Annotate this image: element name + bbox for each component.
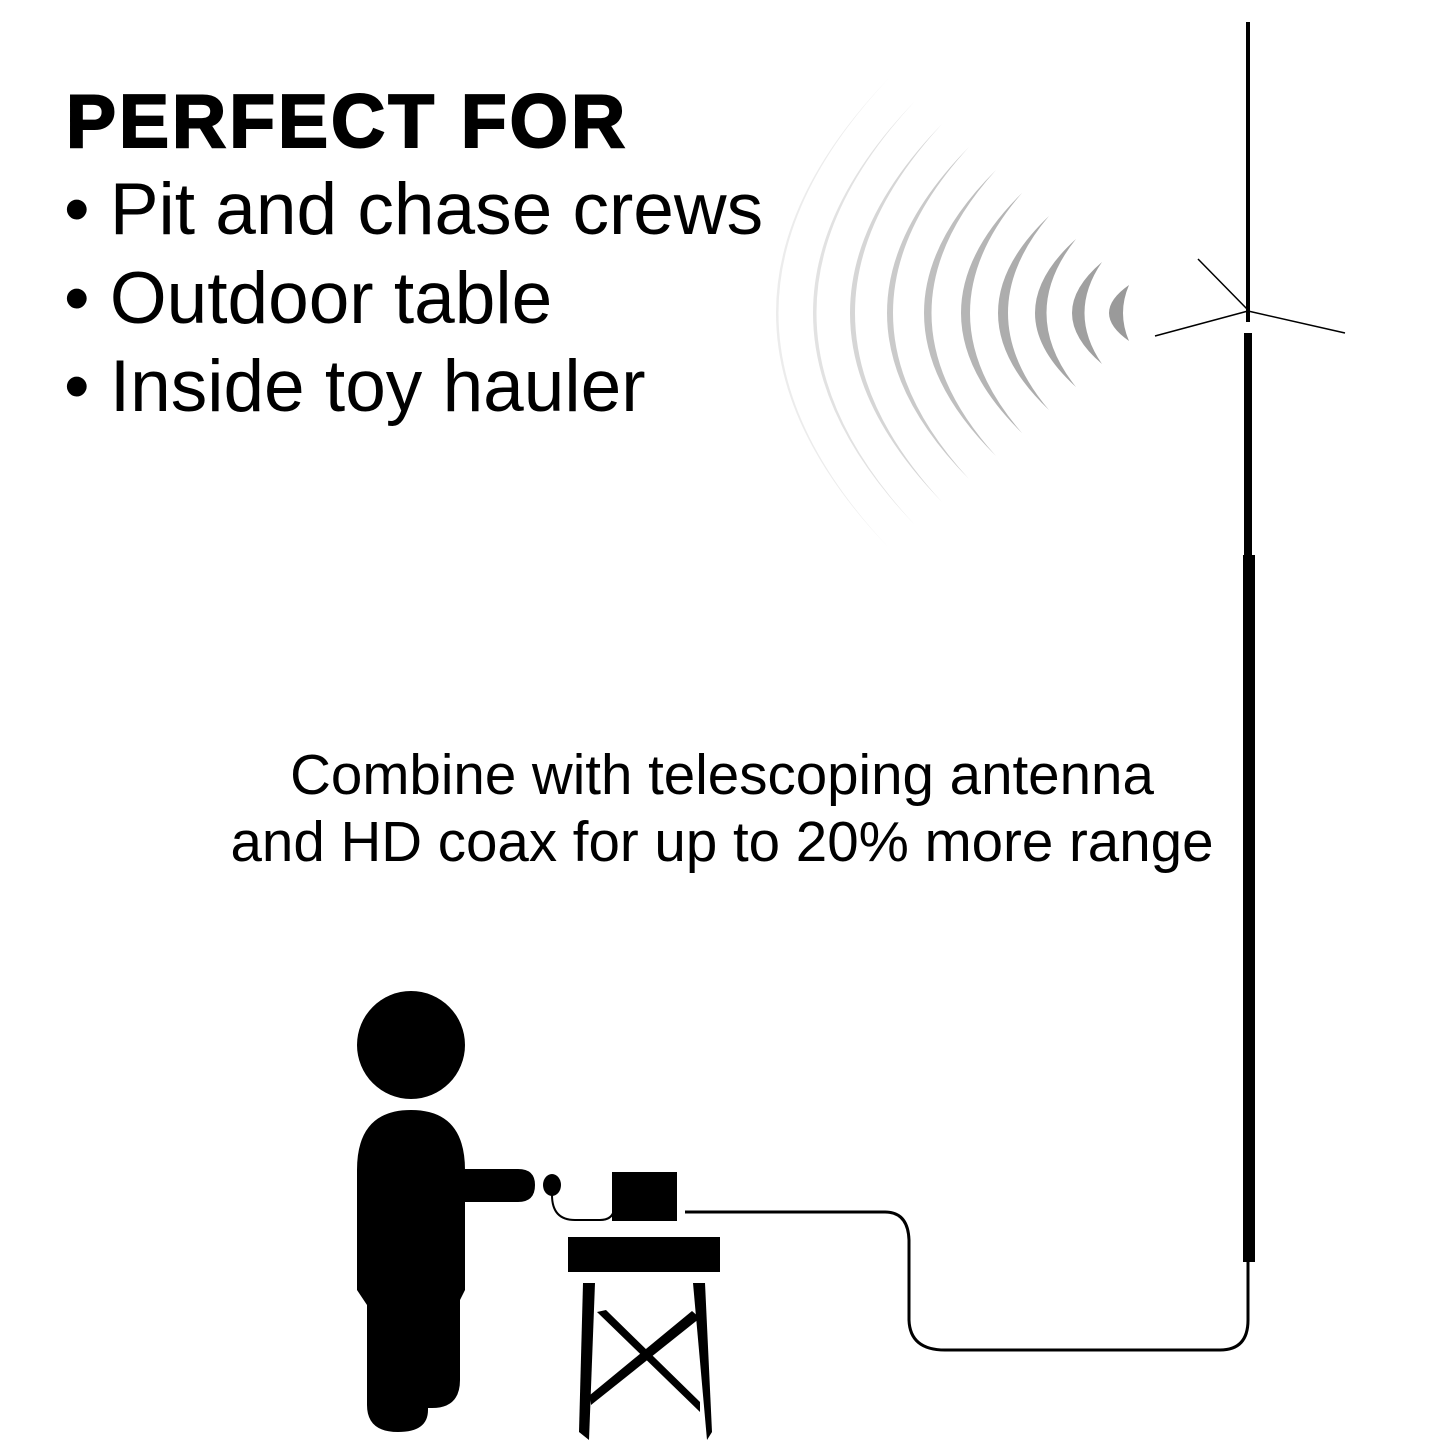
bullet 3: • Inside toy hauler xyxy=(64,346,646,427)
coax cable xyxy=(685,1212,1248,1350)
table xyxy=(568,1237,720,1440)
antenna xyxy=(1155,22,1345,1262)
radio xyxy=(612,1172,677,1221)
bullet 1: • Pit and chase crews xyxy=(64,169,763,250)
bullet 2: • Outdoor table xyxy=(64,258,552,338)
caption xyxy=(230,743,1214,873)
microphone and cord xyxy=(543,1174,614,1220)
radio waves xyxy=(776,78,1129,548)
heading: perfect for: PERFECT FOR xyxy=(66,79,628,163)
caption: Combine with telescoping antenna xyxy=(290,743,1154,806)
bullet list xyxy=(64,169,763,427)
person xyxy=(357,991,535,1432)
caption: and HD coax for up to 20% more range xyxy=(230,810,1214,873)
